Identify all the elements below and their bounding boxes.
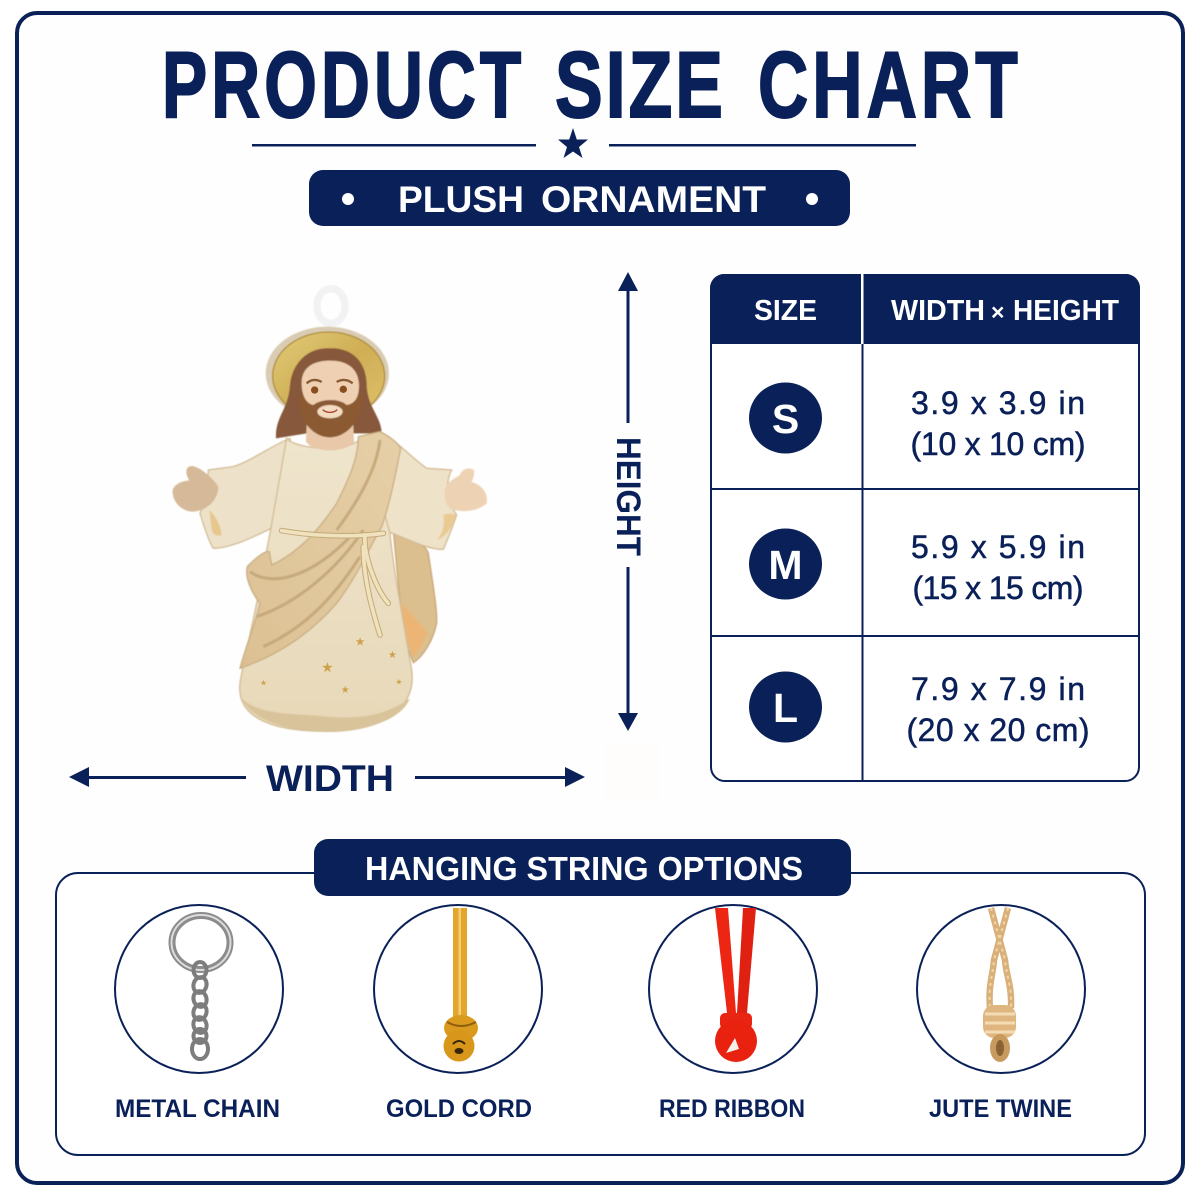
option: red ribbon: RED RIBBON (659, 1095, 805, 1123)
height arrow (609, 272, 647, 731)
option: jute twine: JUTE TWINE (929, 1095, 1072, 1123)
option: metal chain (115, 905, 283, 1123)
row L: 7.9 x 7.9 in (911, 671, 1085, 707)
embroidered stars: ★ (356, 637, 365, 648)
faint image patch (604, 745, 660, 800)
title (162, 31, 1018, 138)
option: red ribbon (649, 905, 817, 1123)
title divider with star (252, 128, 916, 158)
row S (749, 382, 1086, 462)
subtitle banner: PLUSH (398, 179, 524, 220)
title: SIZE (555, 31, 723, 137)
subtitle banner: ORNAMENT (541, 179, 766, 220)
embroidered stars: ★ (322, 660, 333, 674)
row L: (20 x 20 cm) (906, 712, 1090, 748)
option: metal chain: METAL CHAIN (115, 1095, 280, 1123)
height label: HEIGHT (609, 437, 647, 556)
row M: (15 x 15 cm) (912, 570, 1084, 606)
eyes (307, 380, 353, 394)
row S: 3.9 x 3.9 in (911, 385, 1085, 421)
row S: S (772, 396, 799, 442)
hem shading (242, 698, 410, 731)
table header (710, 274, 1140, 344)
option: gold cord (374, 905, 542, 1123)
sash (240, 432, 401, 668)
panel: hanging string options (56, 839, 1145, 1155)
tunic (240, 437, 412, 731)
row S: (10 x 10 cm) (910, 426, 1086, 462)
panel heading (314, 839, 851, 896)
halo (266, 327, 389, 420)
hanging loop (317, 289, 345, 323)
hair (276, 348, 382, 438)
row M: 5.9 x 5.9 in (911, 529, 1085, 565)
table header: SIZE (754, 295, 817, 327)
embroidered stars (261, 637, 403, 695)
size table (710, 274, 1140, 781)
embroidered stars: ★ (396, 678, 403, 686)
beard (299, 395, 362, 437)
panel heading: HANGING STRING OPTIONS (365, 850, 803, 887)
inner orange lining (402, 603, 427, 657)
title: PRODUCT (162, 33, 521, 138)
width arrow (69, 758, 585, 799)
mouth (317, 405, 343, 418)
row L (749, 671, 1090, 748)
subtitle banner (309, 170, 850, 226)
back of robe (393, 530, 437, 663)
option: gold cord: GOLD CORD (386, 1095, 532, 1123)
embroidered stars: ★ (389, 649, 398, 659)
table header: × (991, 299, 1004, 325)
row M (749, 528, 1085, 606)
row M: M (768, 542, 803, 588)
neck (306, 425, 354, 450)
rope belt (282, 531, 388, 635)
embroidered stars: ★ (341, 685, 350, 695)
product image: plush ornament figure (173, 289, 487, 731)
sash fold lines (250, 440, 380, 647)
embroidered stars: ★ (261, 679, 268, 687)
width label: WIDTH (266, 758, 394, 799)
sleeves (200, 433, 457, 549)
table header: HEIGHT (1013, 295, 1119, 327)
face (302, 361, 359, 405)
table header: WIDTH (891, 295, 985, 327)
title: CHART (758, 32, 1018, 137)
hands (173, 466, 487, 512)
option: jute twine (917, 905, 1085, 1123)
row L: L (773, 685, 798, 731)
